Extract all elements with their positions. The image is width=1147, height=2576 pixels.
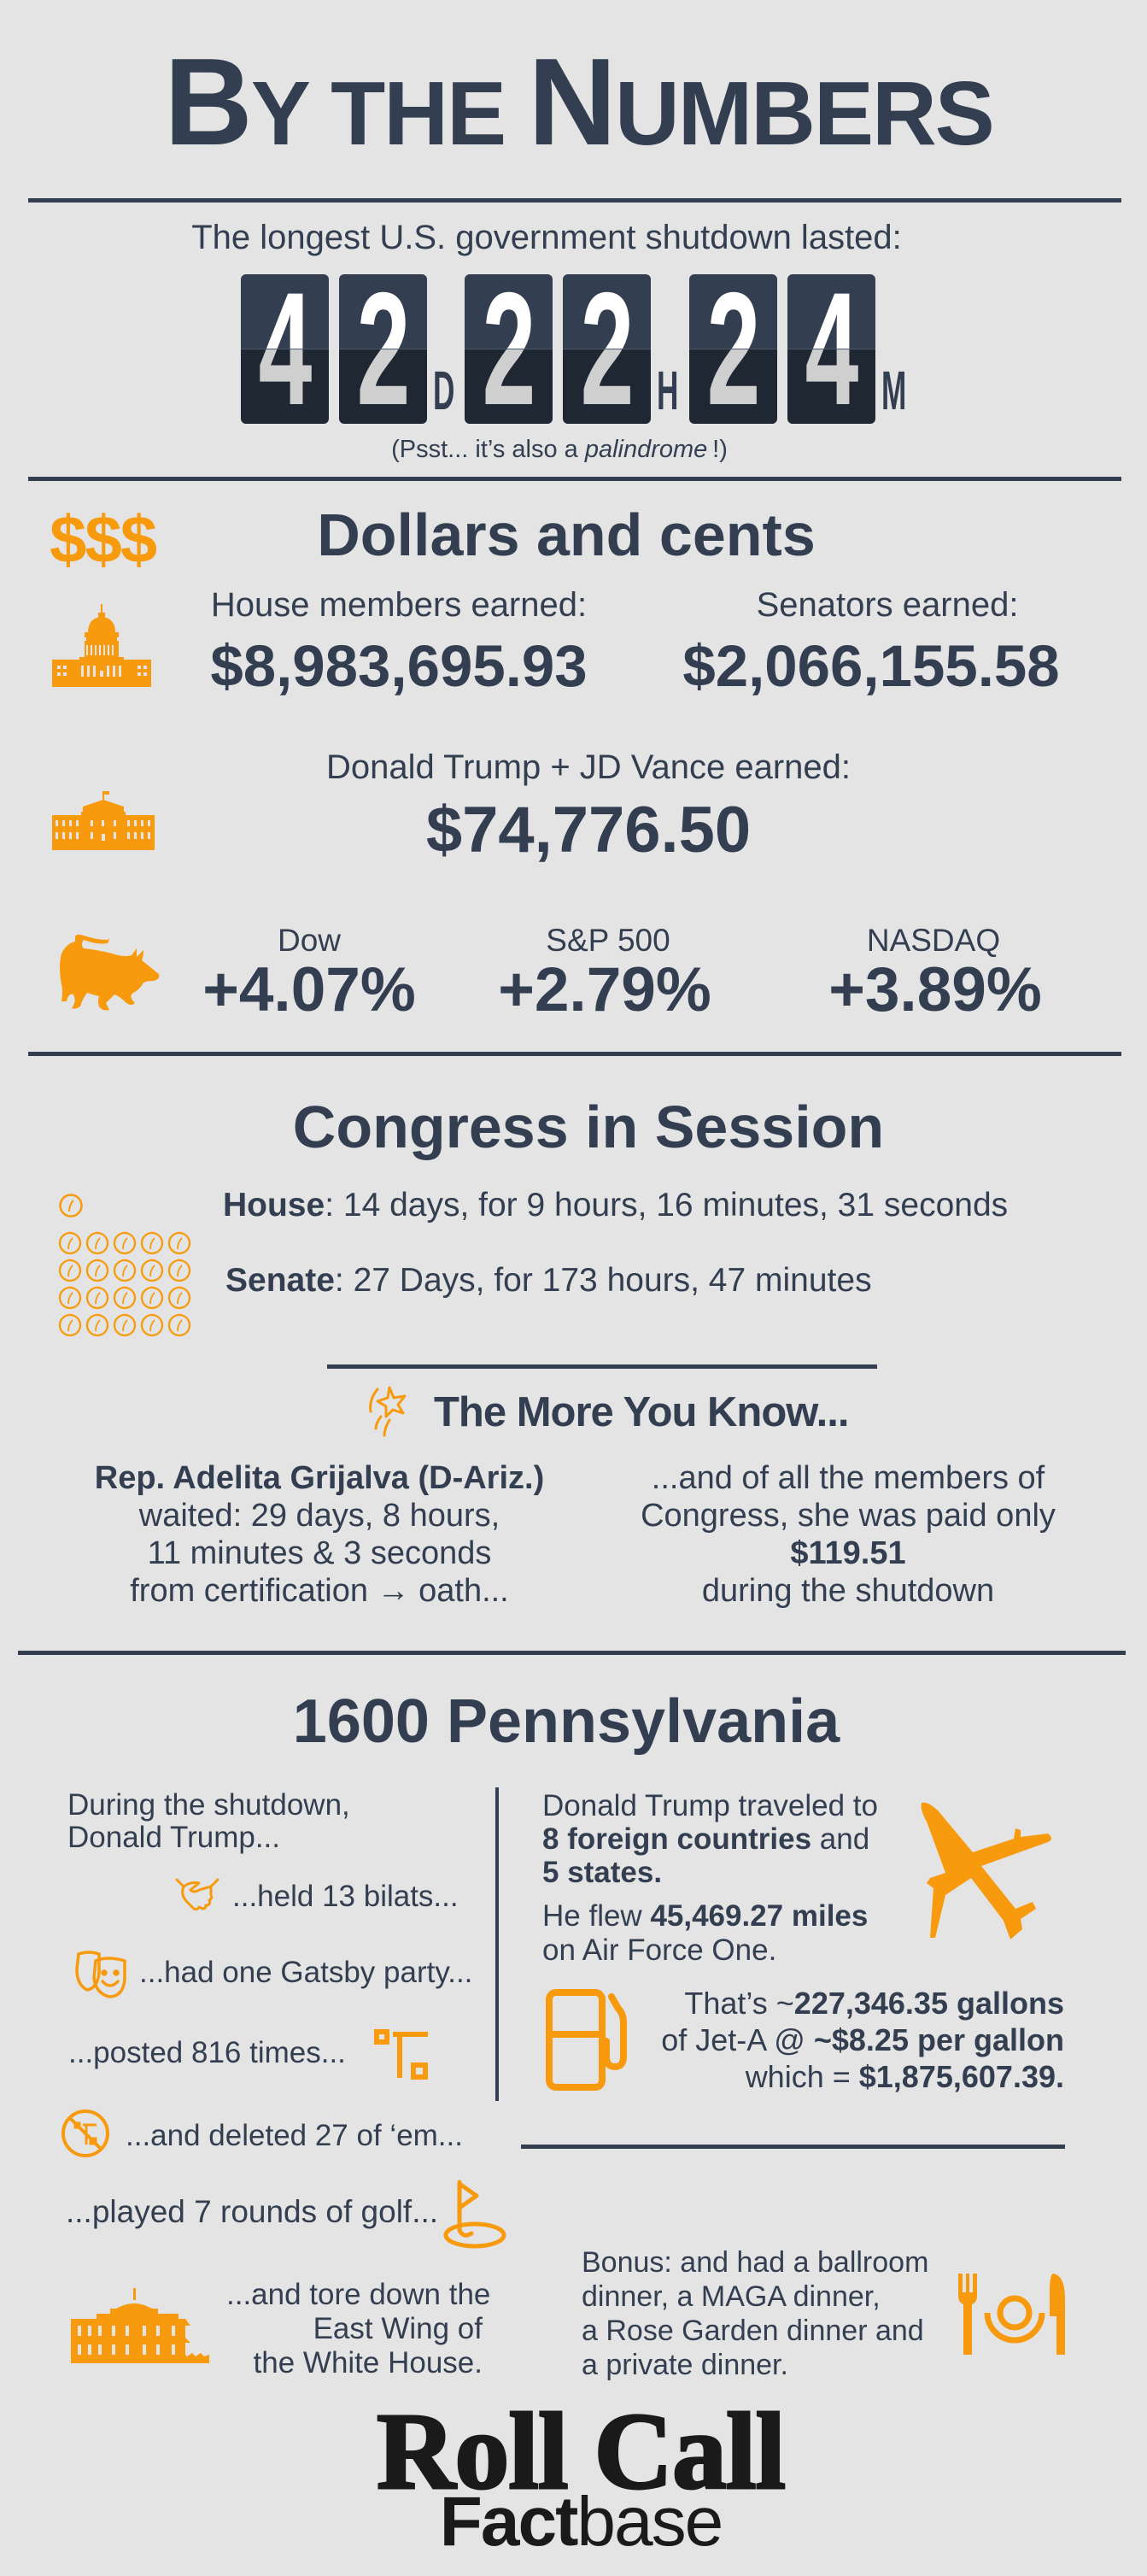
heading: 1600 Pennsylvania: 1600 Pennsylvania bbox=[293, 1687, 840, 1756]
item: bilats: ...held 13 bilats... bbox=[232, 1880, 459, 1913]
fuel cost text bbox=[661, 1986, 1064, 2094]
icon: airplane bbox=[921, 1803, 1051, 1939]
logo: Roll Call Factbase: Factbase bbox=[440, 2483, 722, 2561]
bonus dinners text: a Rose Garden dinner and bbox=[582, 2315, 924, 2347]
palindrome note: (Psst... it’s also a palindrome !) bbox=[391, 436, 728, 463]
fact: Grijalva pay: $119.51 bbox=[790, 1535, 906, 1571]
icon: dollar signs: $$$ bbox=[50, 502, 155, 577]
item: East Wing: East Wing of bbox=[313, 2312, 483, 2345]
flip clock counter: M bbox=[881, 360, 906, 421]
House session text: House: 14 days, for 9 hours, 16 minutes, 31 seconds bbox=[223, 1187, 1008, 1223]
heading: The More You Know: The More You Know... bbox=[434, 1389, 848, 1435]
item: posted: ...posted 816 times... bbox=[68, 2036, 346, 2069]
fact: Grijalva pay: during the shutdown bbox=[702, 1573, 994, 1609]
icon: handshake bbox=[175, 1878, 219, 1910]
item: Gatsby party: ...had one Gatsby party... bbox=[139, 1956, 472, 1989]
travel text: 8 foreign countries and bbox=[542, 1822, 869, 1856]
icon: cutlery plate bbox=[958, 2274, 1065, 2355]
icon: deleted posts bbox=[61, 2110, 109, 2157]
bonus dinners text bbox=[582, 2246, 928, 2381]
text: $2,066,155.58 bbox=[682, 633, 1060, 699]
fact: Grijalva wait: 11 minutes & 3 seconds bbox=[148, 1535, 491, 1571]
item: East Wing: ...and tore down the bbox=[226, 2278, 490, 2311]
icon: theater masks bbox=[75, 1951, 126, 1998]
fact: Grijalva pay bbox=[641, 1460, 1056, 1609]
market stats bbox=[202, 923, 1042, 1024]
Senate earnings: Senators earned: bbox=[757, 586, 1018, 624]
text: on Air Force One. bbox=[542, 1933, 776, 1967]
travel text: Donald Trump traveled to bbox=[542, 1789, 878, 1822]
fact: Grijalva wait: waited: 29 days, 8 hours, bbox=[139, 1498, 500, 1534]
market stats: +4.07% bbox=[202, 955, 416, 1024]
NASDAQ: NASDAQ bbox=[867, 923, 1000, 958]
icon: white house bbox=[52, 791, 155, 850]
fact: Grijalva pay: Congress, she was paid only bbox=[641, 1498, 1056, 1534]
item: deleted: ...and deleted 27 of ‘em... bbox=[126, 2119, 463, 2152]
Dow: Dow bbox=[278, 923, 341, 958]
shutdown intro text: The longest U.S. government shutdown lasted: bbox=[191, 219, 902, 256]
fact: Grijalva wait: Rep. Adelita Grijalva (D-Ariz.) bbox=[95, 1460, 544, 1496]
heading: Dollars and cents: Dollars and cents bbox=[317, 502, 816, 568]
market stats: +2.79% bbox=[498, 955, 711, 1024]
icon: single clock bbox=[59, 1194, 83, 1218]
fact: Grijalva wait bbox=[95, 1460, 544, 1609]
text: $8,983,695.93 bbox=[210, 633, 588, 699]
fuel cost text: of Jet-A @ ~$8.25 per gallon bbox=[661, 2022, 1064, 2057]
S&P 500: S&P 500 bbox=[546, 923, 670, 958]
icon: clock grid bbox=[58, 1232, 191, 1336]
Trump + Vance earnings: Donald Trump + JD Vance earned: bbox=[326, 748, 851, 786]
text: $74,776.50 bbox=[426, 794, 751, 866]
item: golf: ...played 7 rounds of golf... bbox=[66, 2194, 438, 2229]
heading: Congress in Session: Congress in Session bbox=[293, 1094, 884, 1160]
fuel cost text: which = $1,875,607.39. bbox=[746, 2059, 1064, 2094]
market stats: +3.89% bbox=[828, 955, 1042, 1024]
left column intro bbox=[67, 1788, 350, 1854]
Senate session text: Senate: 27 Days, for 173 hours, 47 minutes bbox=[225, 1262, 872, 1299]
text: He flew 45,469.27 miles bbox=[542, 1899, 868, 1933]
flip clock counter bbox=[241, 274, 906, 424]
item: East Wing: the White House. bbox=[254, 2346, 483, 2379]
House earnings: House members earned: bbox=[211, 586, 587, 624]
bonus dinners text: dinner, a MAGA dinner, bbox=[582, 2280, 881, 2313]
icon: truth social bbox=[374, 2029, 428, 2080]
flip clock counter: D bbox=[433, 360, 454, 421]
fact: Grijalva wait: from certification → oath... bbox=[130, 1573, 509, 1609]
icon: shooting star bbox=[369, 1386, 407, 1437]
icon: white house east wing bbox=[71, 2288, 209, 2363]
bonus dinners text: Bonus: and had a ballroom bbox=[582, 2246, 928, 2279]
fact: Grijalva pay: ...and of all the members of bbox=[652, 1460, 1045, 1496]
bonus dinners text: a private dinner. bbox=[582, 2349, 788, 2381]
left column intro: Donald Trump... bbox=[67, 1821, 280, 1854]
flip clock counter: H bbox=[657, 360, 678, 421]
icon: bull bbox=[60, 935, 159, 1010]
icon: golf flag bbox=[444, 2180, 506, 2249]
title: BY THE NUMBERS bbox=[164, 32, 993, 171]
travel text: 5 states. bbox=[542, 1856, 662, 1889]
left column intro: During the shutdown, bbox=[67, 1788, 350, 1822]
travel text bbox=[542, 1789, 878, 1889]
item: East Wing bbox=[226, 2278, 490, 2379]
icon: fuel pump bbox=[546, 1989, 627, 2091]
icon: capitol bbox=[52, 604, 151, 687]
logo: Roll Call Factbase: Roll Call bbox=[377, 2391, 785, 2512]
fuel cost text: That’s ~227,346.35 gallons bbox=[684, 1986, 1064, 2021]
